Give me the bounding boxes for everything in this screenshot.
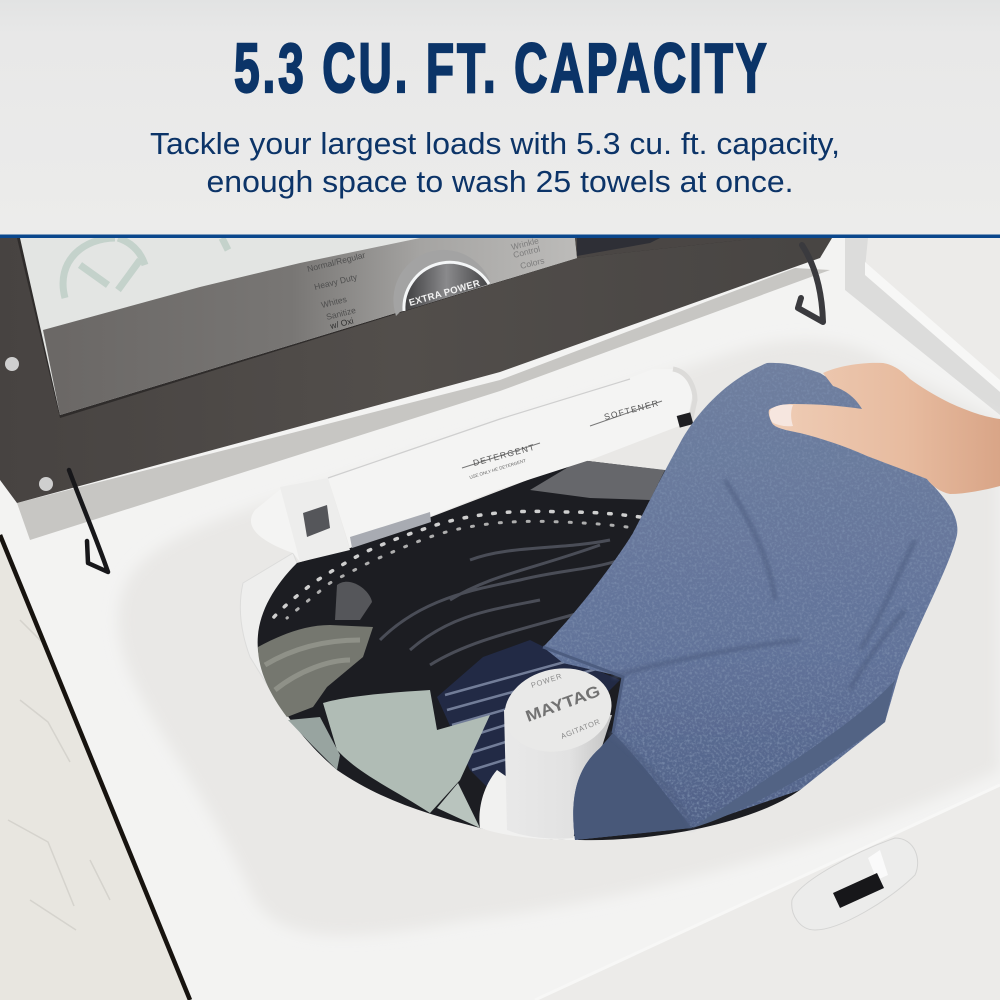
detergent dispenser [251,369,695,562]
console labels: Normal/Regular [306,250,366,274]
agitator [479,659,619,840]
mint pattern reflection [63,238,228,298]
hand [769,363,1000,494]
header band [0,0,1000,238]
detergent dispenser: DETERGENT [472,442,536,468]
lid lock latch [792,838,918,930]
agitator: POWER [530,671,563,690]
console labels: Colors [519,255,545,271]
mint towel [288,690,490,828]
console labels: w/ Oxi [328,315,355,331]
towel shaded lower folds [573,733,692,840]
open lid [0,235,832,540]
washer top deck [118,238,1000,1000]
console labels: Control [512,244,541,260]
subtitle: enough space to wash 25 towels at once. [206,164,794,199]
console labels: Sanitize [325,305,357,322]
extra power button: EXTRA POWER [408,278,482,309]
lid hinges [69,245,823,572]
console labels: Heavy Duty [313,271,359,292]
detergent dispenser: USE ONLY HE DETERGENT [469,458,527,480]
detergent dispenser: SOFTENER [603,398,660,422]
console labels: Wrinkle [510,235,540,252]
title: 5.3 CU. FT. CAPACITY [234,28,767,107]
wash tub with perforated basket [240,460,890,840]
console labels [306,235,545,331]
blue towel [543,363,957,840]
photo: washer background [0,235,1000,1000]
subtitle: Tackle your largest loads with 5.3 cu. ft. capacity, [150,126,840,161]
agitator: AGITATOR [559,717,602,741]
marble countertop [0,535,190,1000]
maytag logo text: MAYTAG [524,683,603,726]
subtitle [150,126,840,199]
console labels: Whites [320,294,348,310]
extra power button [393,250,491,316]
